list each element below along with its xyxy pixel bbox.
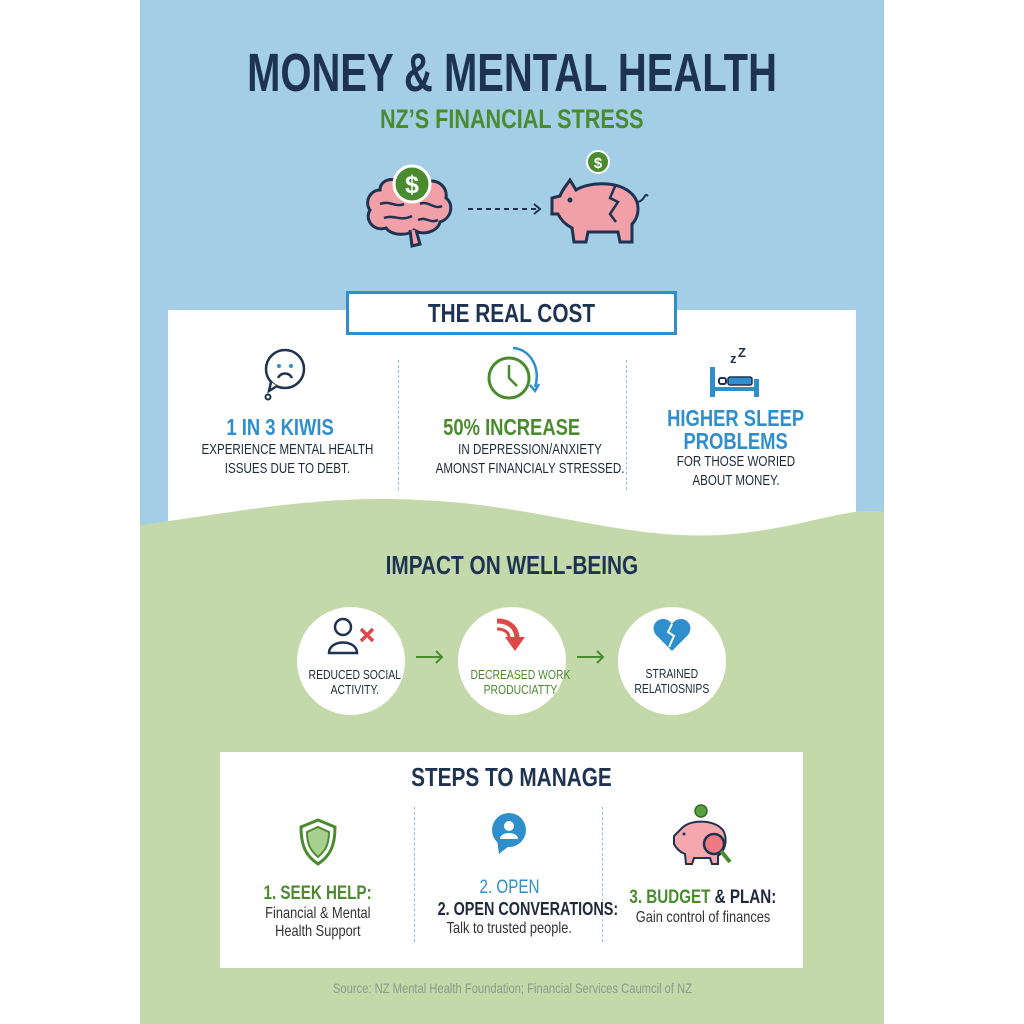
circle: strained relationships: RELATIOSNIPS bbox=[635, 681, 709, 696]
stat: higher sleep problems: HIGHER SLEEP bbox=[667, 405, 804, 431]
circle: decreased work productivity: PRODUCIATTY bbox=[484, 682, 557, 697]
circle: strained relationships: STRAINED bbox=[646, 666, 698, 681]
circle: strained relationships bbox=[618, 607, 726, 715]
stat: 50% increase bbox=[436, 346, 624, 477]
step 3: budget & plan: 3. BUDGET & PLAN: bbox=[630, 887, 776, 908]
circle: reduced social activity bbox=[297, 607, 405, 715]
step 1: seek help: Financial & Mental bbox=[265, 905, 370, 922]
arrow bbox=[577, 650, 604, 664]
icon: brain with coin: $ bbox=[405, 171, 419, 199]
circle: decreased work productivity: DECREASED WORK bbox=[470, 667, 570, 682]
heading: the real cost bbox=[346, 291, 677, 335]
title: MONEY & MENTAL HEALTH bbox=[247, 43, 777, 103]
stat: 1 in 3 kiwis: EXPERIENCE MENTAL HEALTH bbox=[201, 442, 373, 458]
step 2: open conversations: 2. OPEN bbox=[479, 877, 539, 898]
icon: brain with coin bbox=[366, 164, 452, 248]
icon: broken piggy bank bbox=[550, 150, 649, 244]
step 2: open conversations: Talk to trusted people. bbox=[446, 920, 572, 937]
step 1: seek help bbox=[263, 818, 372, 940]
arrow: dashed bbox=[468, 203, 542, 215]
step 1: seek help: Health Support bbox=[275, 923, 360, 940]
stat: higher sleep problems: FOR THOSE WORIED bbox=[677, 454, 795, 470]
icon: broken piggy bank: $ bbox=[594, 155, 603, 172]
icon: bed with zzz: Z bbox=[738, 345, 746, 360]
circle: decreased work productivity bbox=[458, 607, 566, 715]
heading: the real cost: THE REAL COST bbox=[428, 298, 595, 328]
icon: bed with zzz bbox=[710, 345, 759, 397]
step 2: open conversations bbox=[438, 813, 618, 937]
heading: impact on well-being: IMPACT ON WELL-BEING bbox=[386, 550, 638, 580]
stat: 1 in 3 kiwis: ISSUES DUE TO DEBT. bbox=[225, 461, 350, 477]
stat: 50% increase: AMONST FINANCIALY STRESSED. bbox=[436, 461, 624, 477]
step 2: open conversations: 2. OPEN CONVERATIONS: bbox=[438, 899, 618, 919]
stat: higher sleep problems: PROBLEMS bbox=[684, 428, 788, 454]
heading: steps to manage: STEPS TO MANAGE bbox=[411, 762, 612, 792]
stat: higher sleep problems: ABOUT MONEY. bbox=[692, 473, 780, 489]
icon: bed with zzz: z bbox=[730, 351, 737, 366]
subtitle: NZ’S FINANCIAL STRESS bbox=[380, 104, 644, 134]
stat: 50% increase: 50% INCREASE bbox=[443, 414, 581, 440]
step 3: budget & plan: Gain control of finances bbox=[636, 909, 770, 926]
dividers bbox=[398, 360, 399, 490]
stat: higher sleep problems bbox=[667, 345, 804, 489]
icon: clock with arrow bbox=[488, 346, 540, 400]
icon: sad face thought bubble bbox=[264, 348, 306, 400]
panel: steps to manage bbox=[220, 752, 803, 968]
stat: 50% increase: IN DEPRESSION/ANXIETY bbox=[458, 442, 602, 458]
arrow bbox=[416, 650, 444, 664]
stat: 1 in 3 kiwis bbox=[201, 348, 373, 477]
step 3: budget & plan bbox=[630, 804, 776, 926]
step 1: seek help: 1. SEEK HELP: bbox=[263, 883, 372, 904]
circle: reduced social activity: REDUCED SOCIAL bbox=[309, 667, 401, 682]
source text: Source: NZ Mental Health Foundation; Financial Services Caumcil of NZ bbox=[332, 980, 692, 996]
stat: 1 in 3 kiwis: 1 IN 3 KIWIS bbox=[226, 414, 334, 440]
circle: reduced social activity: ACTIVITY. bbox=[331, 682, 379, 697]
